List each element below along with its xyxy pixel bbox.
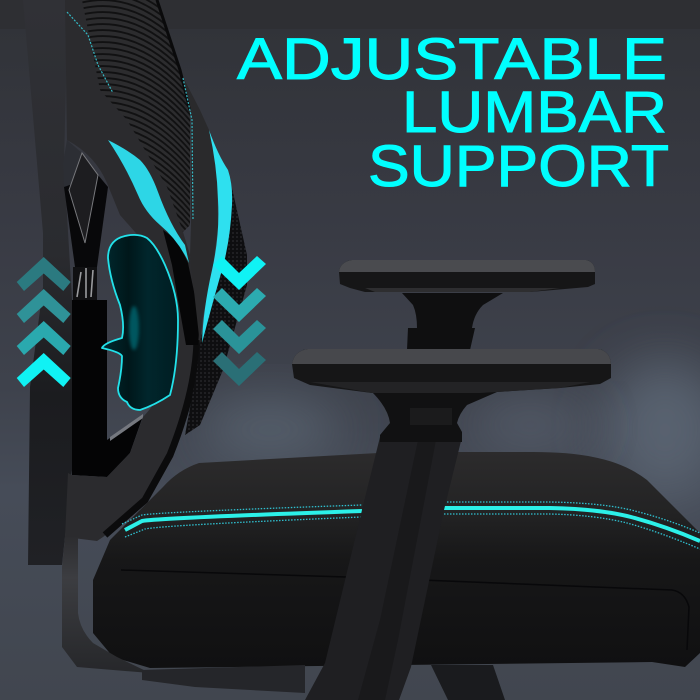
seat stitching	[122, 502, 700, 549]
arrow down 1	[213, 256, 266, 290]
backrest frame arc	[65, 0, 200, 541]
strut chrome	[73, 267, 97, 300]
seat fold line	[121, 570, 689, 650]
armrest support post	[305, 437, 462, 700]
backrest strut	[63, 140, 108, 300]
black woven strap	[185, 188, 247, 435]
stitching on backrest	[67, 12, 193, 220]
mesh edge line	[157, 0, 190, 110]
seat frame bottom	[62, 537, 150, 673]
title line 3: SUPPORT	[368, 134, 669, 199]
mesh backrest	[82, 0, 190, 232]
lumbar pad highlighted	[102, 235, 178, 410]
window highlight bar	[110, 414, 143, 441]
arrow up 2	[17, 289, 71, 323]
arrow up 1	[17, 257, 71, 291]
lower armrest	[292, 349, 611, 442]
upper arm stem	[402, 293, 503, 350]
seat underside bracket	[142, 665, 305, 693]
seat piping	[125, 508, 700, 541]
post centre highlight	[358, 440, 436, 700]
arrows up	[17, 257, 71, 387]
mesh ribs	[82, 0, 190, 232]
lower arm stem	[372, 392, 497, 442]
arrows down	[213, 256, 266, 386]
strut diamond	[69, 153, 98, 243]
gas lift	[431, 665, 505, 700]
frame outer dark band	[105, 340, 197, 535]
lumbar mechanism black block	[72, 300, 143, 477]
arrow down 2	[213, 288, 266, 322]
chair back post	[23, 0, 72, 565]
title line 1: ADJUSTABLE	[237, 27, 667, 92]
arrow down 3	[213, 320, 266, 354]
cyan accent left blade	[108, 140, 189, 263]
cyan accent right blade	[202, 130, 232, 343]
title	[237, 27, 669, 199]
upper armrest	[339, 260, 595, 350]
upper arm pad	[339, 260, 595, 292]
title line 2: LUMBAR	[402, 80, 667, 145]
arrow down 4	[213, 352, 266, 386]
side mesh panel	[183, 77, 218, 345]
frame inner shade	[163, 230, 200, 345]
arrow up 3	[17, 321, 71, 355]
seat cushion	[93, 452, 700, 668]
arrow up 4	[17, 353, 71, 387]
lower arm pad	[292, 349, 611, 393]
